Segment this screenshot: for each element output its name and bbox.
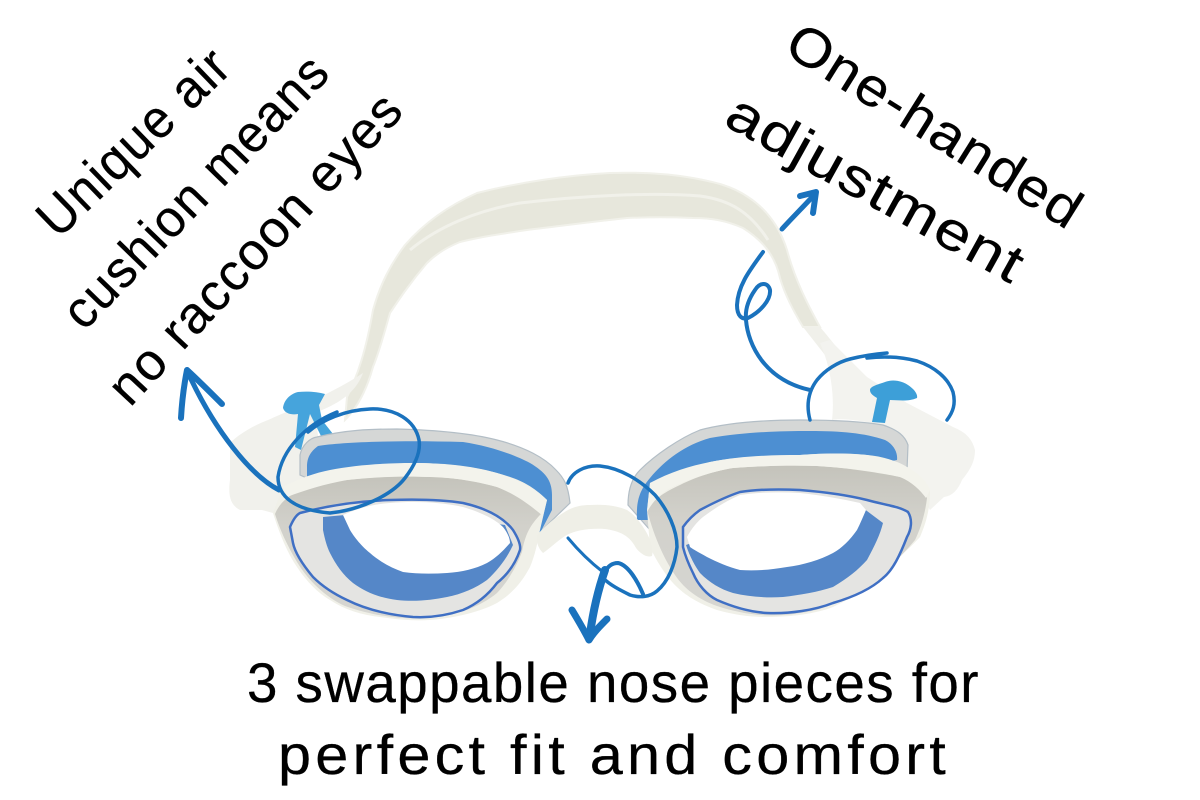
annotation: air cushion circle and arrow: [181, 370, 419, 513]
annotation: adjustment circle and arrow: [737, 192, 954, 420]
right strap clip: [820, 340, 975, 510]
left lens opening: [343, 502, 510, 574]
left lens clear area: [290, 500, 520, 617]
caption: nose pieces: perfect fit and comfort: [278, 723, 950, 786]
right lens opening: [687, 492, 866, 570]
right lens grey body: [647, 466, 927, 615]
right blue pin: [870, 381, 917, 423]
annotation: nose piece circle and arrow: [568, 466, 677, 640]
right lens: [628, 420, 930, 617]
circle around strap clip: [808, 353, 954, 420]
left lens grey body: [275, 476, 541, 618]
left strap clip: [229, 373, 363, 513]
caption: adjustment: [716, 11, 1094, 295]
caption: adjustment: One-handed: [776, 11, 1094, 241]
circle around nose bridge: [568, 466, 677, 597]
left frame and lens body: [273, 463, 547, 620]
left blue seal: [323, 510, 513, 601]
circle around air cushion: [278, 409, 419, 513]
left lens upper rim: [300, 429, 570, 532]
right white band: [647, 454, 930, 512]
right frame and lens body: [647, 454, 930, 617]
right blue seal: [686, 508, 883, 597]
caption: nose pieces: 3 swappable nose pieces for: [247, 651, 980, 714]
caption: nose pieces: [247, 651, 980, 786]
caption: air cushion: cushion means: [51, 43, 341, 340]
left white band: [283, 463, 547, 516]
right lens clear area: [683, 489, 911, 613]
caption: air cushion: Unique air: [25, 35, 243, 249]
head strap: [345, 173, 841, 420]
nose bridge: [537, 505, 653, 556]
caption: adjustment: adjustment: [716, 82, 1036, 295]
left air cushion: [307, 441, 552, 533]
right lens upper rim: [628, 420, 908, 530]
curly arrow to adjustment caption: [737, 252, 810, 390]
arrow to cushion caption: [190, 377, 279, 490]
left lens: [273, 429, 570, 620]
right air cushion: [637, 431, 897, 520]
goggles illustration: [229, 173, 975, 620]
left blue pin: [283, 392, 333, 450]
caption: air cushion: no raccoon eyes: [96, 80, 415, 416]
squiggle and arrow to nose caption: [604, 563, 643, 594]
